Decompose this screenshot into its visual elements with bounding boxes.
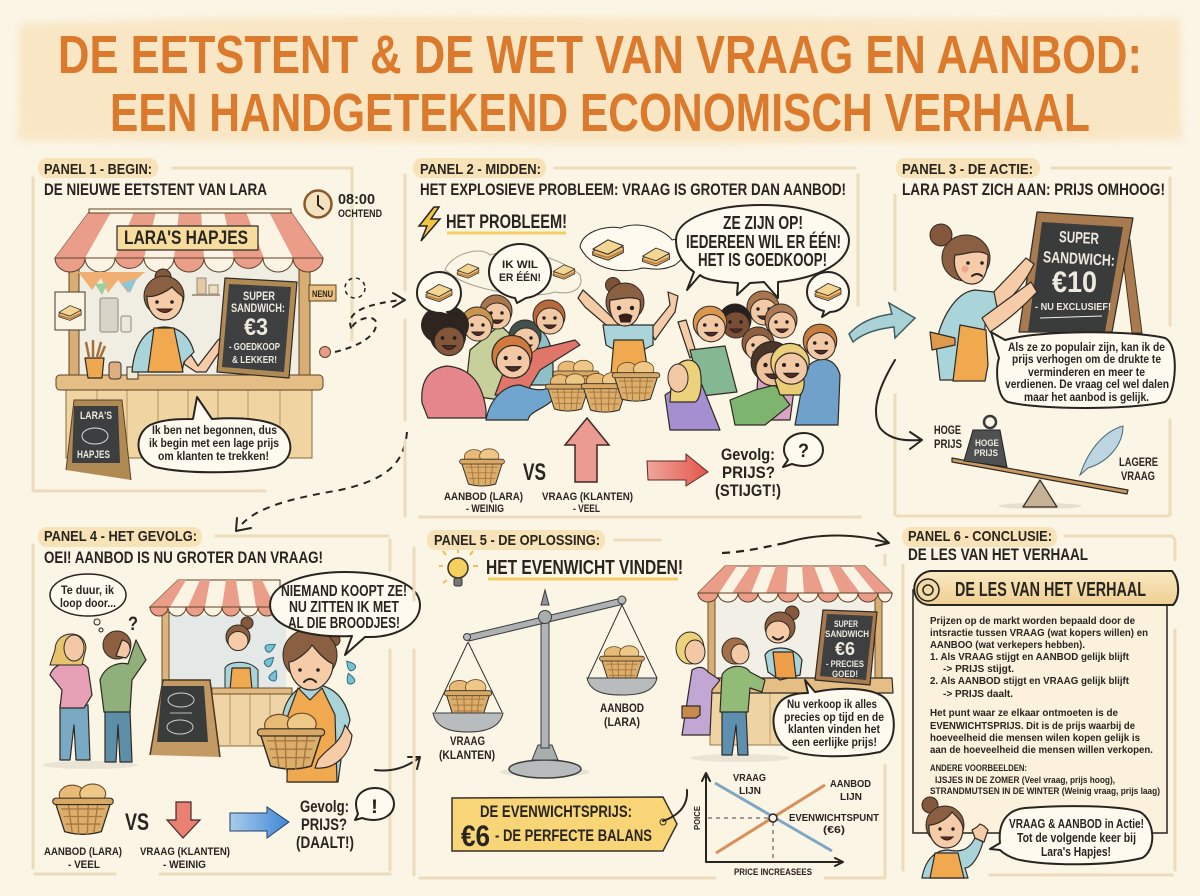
- lesson text: Het punt waar ze elkaar ontmoeten is de: [930, 707, 1118, 719]
- sidewalk sign: [66, 400, 131, 480]
- consequence text: [715, 445, 781, 500]
- speech bubble: [774, 680, 894, 756]
- lesson text: STRANDMUTSEN IN DE WINTER (Weinig vraag, prijs laag): [930, 786, 1160, 796]
- consequence text: PRIJS?: [301, 815, 347, 834]
- chart: supply and demand: LIJN: [739, 785, 761, 797]
- consequence text: [296, 797, 354, 852]
- arrow: demand down: [167, 802, 200, 838]
- speech bubble: maar het aanbod is gelijk.: [1024, 390, 1149, 404]
- arrow: panel 1 to panel 2: [320, 278, 405, 358]
- panel: 2 midden: [405, 158, 860, 517]
- arrow: panel 2 to panel 3: [849, 303, 915, 342]
- supply vs demand row: VRAAG (KLANTEN): [542, 491, 633, 503]
- speech bubble: precies op tijd en de: [784, 710, 884, 724]
- chalkboard 6 euro: €6: [835, 639, 855, 659]
- speech bubble: een eerlijke prijs!: [792, 735, 877, 749]
- problem heading: HET PROBLEEM!: [446, 212, 567, 233]
- left pan: [433, 680, 503, 732]
- lesson text: -> PRIJS stijgt.: [943, 663, 1014, 675]
- panel 2 label: PANEL 2 - MIDDEN:: [420, 161, 541, 178]
- Lara waving: [922, 797, 988, 878]
- bubble: niemand koopt: AL DIE BROODJES!: [288, 615, 400, 632]
- speech bubble: Lara's Hapjes!: [1041, 845, 1111, 859]
- bubble: question: ?: [798, 441, 809, 462]
- title: [17, 16, 1182, 144]
- speech bubble: prijs verhogen om de drukte te: [1012, 352, 1161, 366]
- bubble: ik wil er een: [489, 244, 551, 303]
- supply vs demand row: [44, 784, 394, 871]
- chalkboard 10 euro: SUPER: [1059, 229, 1100, 248]
- icon: light bulb: [439, 550, 478, 586]
- icon: clock: 08:00: [338, 191, 375, 208]
- supply vs demand row: - VEEL: [573, 503, 600, 515]
- lesson text: intsractie tussen VRAAG (wat kopers willen) en: [930, 627, 1148, 639]
- icon: full basket: [53, 784, 113, 835]
- customers walking away: [42, 631, 146, 769]
- speech bubble: verdienen. De vraag cel wel dalen: [1005, 377, 1169, 391]
- seesaw balance: PRIJS: [974, 448, 998, 458]
- arrow: panel 4 to panel 5: [375, 757, 420, 770]
- chart: supply and demand: [692, 772, 880, 878]
- chalkboard 10 euro: - NU EXCLUSIEF!: [1035, 301, 1111, 313]
- chart: supply and demand: PRICE INCREASEES: [734, 867, 812, 878]
- bubble: niemand koopt: NU ZITTEN IK MET: [289, 599, 399, 616]
- seesaw balance: LAGERE: [1119, 457, 1158, 469]
- speech bubble: VRAAG & AANBOD in Actie!: [1009, 817, 1144, 831]
- customers: [676, 632, 790, 762]
- bubble: ze zijn op: HET IS GOEDKOOP!: [698, 250, 827, 270]
- speech bubble: verminderen en meer te: [1028, 365, 1145, 379]
- bubble: ik wil er een: IK WIL: [502, 259, 538, 271]
- lesson text: EVENWICHTSPRIJS. Dit is de prijs waarbij de: [930, 720, 1135, 732]
- supply vs demand row: AANBOD (LARA): [444, 491, 523, 503]
- sign: Lara's Hapjes: LARA'S HAPJES: [124, 228, 248, 249]
- chart: supply and demand: AANBOD: [830, 778, 871, 790]
- thought bubbles with sandwiches: [445, 225, 688, 295]
- panel 1 heading: DE NIEUWE EETSTENT VAN LARA: [44, 180, 267, 199]
- icon: clock: OCHTEND: [338, 208, 382, 220]
- chalkboard 6 euro: SANDWICH: [825, 629, 869, 640]
- bubble: sandwich right: [807, 272, 849, 317]
- speech bubble: Als ze zo populair zijn, kan ik de: [1008, 340, 1165, 354]
- panel 1 label: PANEL 1 - BEGIN:: [44, 161, 152, 178]
- crowd left: [421, 295, 580, 420]
- arrow: panel 2 to panel 4: [236, 432, 407, 531]
- empty chalkboard: [150, 680, 220, 757]
- right pan: [587, 646, 657, 695]
- bubble: te duur: Te duur, ik: [61, 583, 114, 597]
- supply vs demand row: VS: [523, 459, 546, 486]
- sad Lara with basket: [257, 629, 357, 782]
- lesson text: ANDERE VOORBEELDEN:: [930, 763, 1027, 773]
- bubble: exclamation: [355, 788, 394, 820]
- lesson text: aan de hoeveelheid die mensen willen verkopen.: [930, 744, 1153, 756]
- bubble: te duur: loop door...: [60, 596, 116, 610]
- chart: supply and demand: VRAAG: [733, 772, 766, 784]
- bubble: te duur: ?: [128, 614, 138, 635]
- bubble: ik wil er een: ER ÉÉN!: [499, 271, 541, 284]
- seesaw balance: HOGE: [975, 438, 999, 448]
- panel 4 heading: OEI! AANBOD IS NU GROTER DAN VRAAG!: [44, 548, 323, 567]
- price tag: evenwichtsprijs: €6: [461, 820, 490, 853]
- bread baskets: [546, 360, 660, 413]
- speech bubble: Nu verkoop ik alles: [787, 697, 877, 711]
- panel 2 heading: HET EXPLOSIEVE PROBLEEM: VRAAG IS GROTER DAN AANBOD!: [420, 180, 846, 199]
- sidewalk sign: LARA'S: [80, 410, 112, 422]
- chalkboard 6 euro: - PRECIES: [826, 659, 864, 669]
- panel: 3 de actie: [876, 158, 1175, 516]
- lesson text: AANBOO (wat verkepers hebben).: [930, 639, 1085, 651]
- speech bubble: [990, 806, 1152, 864]
- consequence text: PRIJS?: [722, 463, 775, 482]
- chalkboard: & LEKKER!: [232, 354, 277, 366]
- chalkboard 6 euro: GOED!: [832, 669, 858, 679]
- balance scale: (KLANTEN): [439, 750, 495, 762]
- arrow: consequence: [230, 807, 289, 838]
- lesson text: Prijzen op de markt worden bepaald door de: [930, 615, 1135, 627]
- lesson text: 1. Als VRAAG stijgt en AANBOD gelijk blijft: [930, 651, 1129, 663]
- speech bubble: Tot de volgende keer bij: [1017, 831, 1136, 845]
- speech bubble: Ik ben net begonnen, dus: [152, 423, 277, 437]
- speech bubble: [991, 332, 1175, 408]
- speech bubble: om klanten te trekken!: [158, 449, 269, 463]
- chalkboard: €3: [244, 314, 268, 341]
- bubble: exclamation: !: [371, 797, 378, 818]
- bubble: niemand koopt: NIEMAND KOOPT ZE!: [281, 583, 407, 600]
- consequence text: (STIJGT!): [715, 481, 781, 500]
- chalkboard: [217, 278, 297, 378]
- panel 3 label: PANEL 3 - DE ACTIE:: [902, 161, 1033, 178]
- chalkboard 10 euro: SANDWICH:: [1043, 249, 1115, 270]
- supply vs demand row: [444, 418, 823, 515]
- crowd right: [665, 291, 840, 430]
- icon: basket supply: [460, 449, 504, 486]
- stall in background: [150, 580, 292, 746]
- balance scale: VRAAG: [450, 736, 485, 748]
- price tag: evenwichtsprijs: - DE PERFECTE BALANS: [495, 826, 652, 845]
- Lara: [132, 269, 226, 372]
- counter: [56, 375, 323, 458]
- arrow: consequence: [647, 454, 708, 486]
- pot and jars: [85, 340, 138, 379]
- bubble: niemand koopt: [270, 572, 420, 655]
- speech bubble: klanten vinden het: [788, 722, 880, 736]
- lesson text: [930, 615, 1160, 796]
- menu sign: [309, 285, 336, 301]
- panel 6 label: PANEL 6 - CONCLUSIE:: [908, 528, 1052, 545]
- panel 5 label: PANEL 5 - DE OPLOSSING:: [434, 532, 600, 549]
- chalkboard 6 euro: SUPER: [834, 619, 858, 630]
- seesaw balance: VRAAG: [1121, 471, 1155, 483]
- chalkboard: - GOEDKOOP: [229, 341, 280, 353]
- chalkboard 10 euro: [1019, 212, 1142, 333]
- seesaw balance: [934, 416, 1158, 509]
- sidewalk sign: HAPJES: [77, 449, 110, 461]
- bubble: ze zijn op: ZE ZIJN OP!: [723, 213, 803, 233]
- supply vs demand row: - WEINIG: [163, 859, 206, 871]
- icon: lightning: [419, 207, 440, 241]
- balance scale: AANBOD: [600, 703, 644, 715]
- market stall: [55, 209, 336, 480]
- chart: supply and demand: POICE: [692, 806, 702, 830]
- consequence text: (DAALT!): [296, 833, 354, 852]
- balance scale: [433, 590, 657, 778]
- lesson text: -> PRIJS daalt.: [943, 688, 1013, 700]
- panel 4 label: PANEL 4 - HET GEVOLG:: [44, 528, 197, 545]
- Lara adjusting board: [930, 224, 1037, 381]
- supply vs demand row: AANBOD (LARA): [44, 846, 122, 858]
- supply vs demand row: - VEEL: [68, 859, 100, 871]
- chart: supply and demand: EVENWICHTSPUNT: [789, 812, 880, 824]
- arrow: to balance: [876, 360, 922, 449]
- supply vs demand row: VS: [125, 809, 149, 836]
- chalkboard 6 euro: [815, 610, 877, 685]
- chalkboard: SUPER: [243, 289, 275, 303]
- panel: 4 het gevolg: [33, 527, 420, 874]
- scroll: [913, 571, 1178, 833]
- panel: 5 de oplossing: [414, 530, 894, 878]
- speech bubble: [139, 397, 290, 472]
- consequence text: Gevolg:: [721, 445, 775, 464]
- chalkboard 10 euro: €10: [1052, 266, 1097, 299]
- supply vs demand row: - WEINIG: [466, 503, 504, 515]
- consequence text: Gevolg:: [300, 797, 349, 816]
- bubble: te duur: [50, 574, 138, 635]
- lesson text: hoeveelheid die mensen wilen kopen gelijk is: [930, 732, 1140, 744]
- heading: het evenwicht: HET EVENWICHT VINDEN!: [486, 557, 683, 579]
- speech bubble: ik begin met een lage prijs: [149, 436, 279, 450]
- feather: [1080, 426, 1123, 475]
- icon: clock: [304, 190, 382, 220]
- supply vs demand row: VRAAG (KLANTEN): [140, 846, 230, 858]
- hanging menu card: [55, 292, 85, 330]
- seesaw balance: PRIJS: [934, 439, 962, 451]
- price tag: evenwichtsprijs: DE EVENWICHTSPRIJS:: [480, 802, 632, 821]
- bubble: question: [783, 433, 823, 467]
- bubble: sandwich left: [417, 272, 461, 316]
- Lara selling: [765, 606, 802, 680]
- panel 6 heading: DE LES VAN HET VERHAAL: [908, 545, 1088, 564]
- chart: supply and demand: LIJN: [840, 791, 862, 803]
- Lara with raised arms: [578, 278, 678, 385]
- panel: 1 begin: [33, 158, 382, 491]
- teardrops: [263, 641, 357, 685]
- chalkboard: SANDWICH:: [231, 301, 285, 315]
- balance scale: (LARA): [604, 717, 640, 729]
- menu sign: NENU: [312, 289, 333, 299]
- arrow: demand up: [565, 418, 609, 482]
- arrow: panel 5 to panel 6: [722, 533, 889, 553]
- seesaw balance: HOGE: [934, 425, 961, 437]
- price tag: evenwichtsprijs: [452, 790, 687, 853]
- lesson text: 2. Als AANBOD stijgt en VRAAG gelijk blijft: [930, 675, 1129, 687]
- lesson text: IJSJES IN DE ZOMER (Veel vraag, prijs hoog),: [935, 775, 1115, 785]
- panel: 6 conclusie: [902, 527, 1178, 878]
- bubble: ze zijn op: [676, 205, 849, 298]
- market stall: [676, 566, 893, 762]
- bubble: ze zijn op: IEDEREEN WIL ER ÉÉN!: [686, 231, 841, 252]
- chart: supply and demand: (€6): [823, 824, 845, 836]
